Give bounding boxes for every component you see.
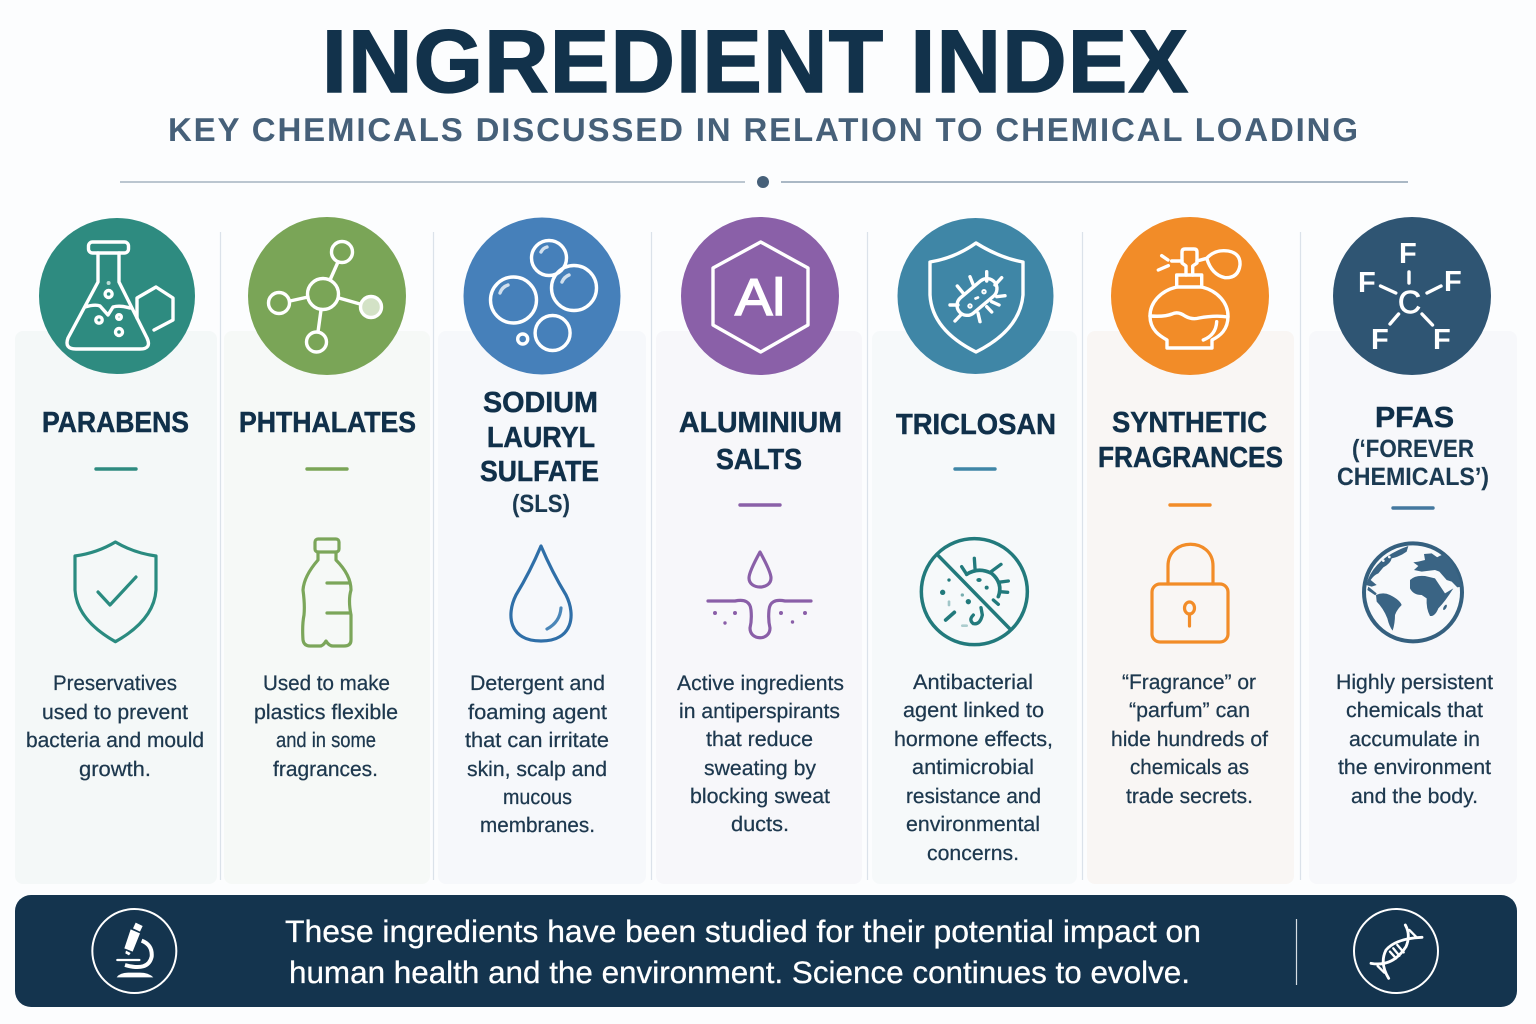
- description: “parfum” can: [1129, 699, 1250, 722]
- icon: microscope: [92, 909, 176, 993]
- heading: [1337, 402, 1489, 491]
- icon: no bacteria: [921, 539, 1027, 645]
- description: accumulate in: [1349, 728, 1480, 751]
- description: hormone effects,: [894, 728, 1053, 751]
- description: in antiperspirants: [679, 700, 840, 723]
- description: agent linked to: [903, 699, 1044, 722]
- description: membranes.: [480, 814, 595, 837]
- icon: carbon fluorine molecule: F: [1444, 266, 1462, 298]
- description: concerns.: [927, 842, 1019, 865]
- description: Active ingredients: [677, 672, 844, 695]
- icon: carbon fluorine molecule: F: [1399, 238, 1417, 270]
- banner message: These ingredients have been studied for their potential impact on: [285, 914, 1201, 949]
- panel: synthetic fragrances: [1087, 217, 1294, 884]
- panel background: [872, 331, 1077, 884]
- description: chemicals as: [1130, 756, 1249, 779]
- icon: carbon fluorine molecule: F: [1358, 267, 1376, 299]
- panel background: [656, 331, 862, 884]
- icon: carbon fluorine molecule: C: [1398, 284, 1421, 320]
- description: and the body.: [1351, 785, 1478, 808]
- icon: shield with check: [75, 542, 156, 642]
- accent dash: [955, 467, 995, 471]
- panel background: [438, 331, 646, 884]
- icon: Al hexagon: [681, 217, 839, 375]
- description: [254, 672, 398, 781]
- heading: PFAS: [1375, 402, 1454, 434]
- description: antimicrobial: [912, 756, 1034, 779]
- description: blocking sweat: [690, 785, 830, 808]
- description: the environment: [1338, 756, 1491, 779]
- description: [465, 672, 609, 837]
- description: resistance and: [906, 785, 1041, 808]
- icon: globe: [1364, 543, 1462, 641]
- description: skin, scalp and: [467, 758, 607, 781]
- description: [677, 672, 844, 836]
- panel: aluminium salts: [656, 217, 862, 884]
- heading: LAURYL: [487, 422, 595, 454]
- heading: SODIUM: [483, 387, 598, 419]
- heading: SALTS: [716, 444, 802, 476]
- banner message: human health and the environment. Science continues to evolve.: [289, 955, 1190, 990]
- description: [26, 672, 204, 781]
- description: “Fragrance” or: [1122, 671, 1256, 694]
- icon: carbon fluorine molecule: [1333, 217, 1491, 375]
- description: ducts.: [731, 813, 789, 836]
- icon: padlock: [1152, 544, 1228, 642]
- icon: carbon fluorine molecule: F: [1433, 324, 1451, 356]
- description: plastics flexible: [254, 701, 398, 724]
- icon: water drop: [511, 546, 571, 641]
- description: Used to make: [263, 672, 390, 695]
- description: trade secrets.: [1126, 785, 1253, 808]
- panel: phthalates: [224, 217, 430, 884]
- panel background: [1087, 331, 1294, 884]
- accent dash: [1170, 503, 1210, 507]
- icon: flask with hexagon: [39, 218, 195, 374]
- description: environmental: [906, 813, 1040, 836]
- banner background: [15, 895, 1517, 1007]
- description: foaming agent: [468, 701, 607, 724]
- description: fragrances.: [273, 758, 378, 781]
- footer banner: [15, 895, 1517, 1007]
- description: Antibacterial: [913, 671, 1033, 694]
- heading: FRAGRANCES: [1098, 442, 1283, 474]
- icon: plastic bottle: [303, 539, 351, 646]
- icon: shield with bacterium: [898, 218, 1054, 374]
- description: mucous: [503, 786, 572, 809]
- icon: bubbles: [464, 218, 620, 374]
- icon: dna helix: [1354, 909, 1438, 993]
- panel: triclosan: [872, 218, 1077, 884]
- heading: [480, 387, 599, 518]
- heading: [1098, 407, 1283, 474]
- heading: ALUMINIUM: [679, 407, 842, 439]
- icon: sweat duct: [708, 552, 811, 638]
- icon: perfume bottle: [1111, 217, 1269, 375]
- title: INGREDIENT INDEX: [322, 11, 1188, 111]
- heading: (‘FOREVER: [1352, 435, 1474, 463]
- panel: sodium lauryl sulfate: [438, 218, 646, 884]
- description: sweating by: [704, 757, 816, 780]
- heading: SULFATE: [480, 456, 599, 488]
- description: that can irritate: [465, 729, 609, 752]
- banner message: [285, 914, 1201, 990]
- panel background: [15, 331, 217, 884]
- panel background: [224, 331, 430, 884]
- heading: CHEMICALS’): [1337, 463, 1489, 491]
- description: Preservatives: [53, 672, 177, 695]
- description: [1336, 671, 1493, 808]
- accent dash: [96, 467, 136, 471]
- description: chemicals that: [1346, 699, 1483, 722]
- description: [1111, 671, 1268, 808]
- description: used to prevent: [42, 701, 188, 724]
- description: and in some: [276, 729, 376, 752]
- heading: [679, 407, 842, 476]
- heading: PARABENS: [42, 407, 189, 439]
- subtitle: KEY CHEMICALS DISCUSSED IN RELATION TO CHEMICAL LOADING: [168, 111, 1358, 148]
- description: Detergent and: [470, 672, 605, 695]
- heading: (SLS): [512, 490, 570, 518]
- icon: molecule: [248, 217, 406, 375]
- description: bacteria and mould: [26, 729, 204, 752]
- description: that reduce: [706, 728, 813, 751]
- header divider: [120, 176, 1408, 188]
- icon: carbon fluorine molecule: F: [1371, 324, 1389, 356]
- icon: Al hexagon: Al: [735, 269, 785, 327]
- panel background: [1309, 331, 1517, 884]
- panel: pfas: [1309, 217, 1517, 884]
- description: Highly persistent: [1336, 671, 1493, 694]
- heading: TRICLOSAN: [896, 409, 1056, 441]
- accent dash: [1393, 506, 1433, 510]
- accent dash: [740, 503, 780, 507]
- description: [894, 671, 1053, 865]
- heading: PHTHALATES: [239, 407, 416, 439]
- heading: SYNTHETIC: [1112, 407, 1267, 439]
- description: hide hundreds of: [1111, 728, 1268, 751]
- panel: parabens: [15, 218, 217, 884]
- accent dash: [307, 467, 347, 471]
- description: growth.: [79, 758, 151, 781]
